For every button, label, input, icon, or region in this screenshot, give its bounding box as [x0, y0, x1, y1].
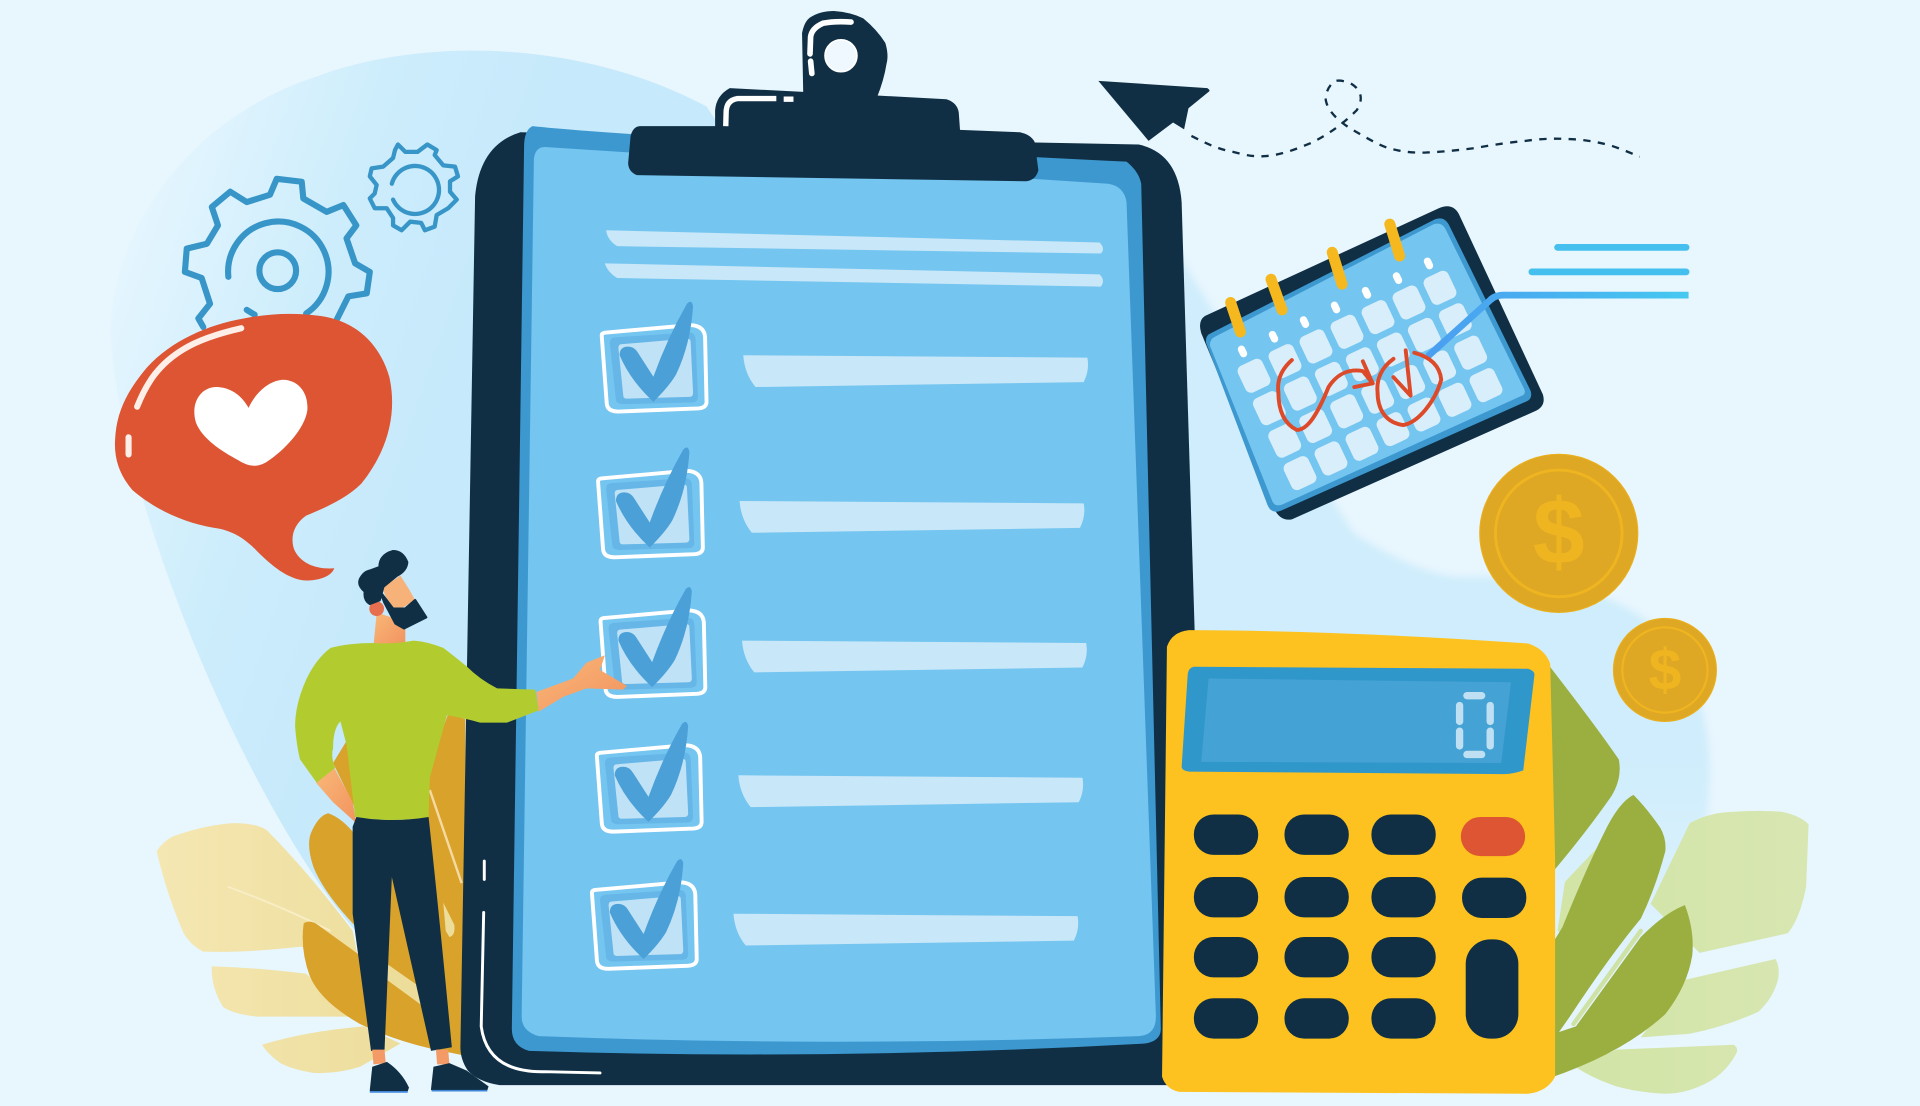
man — [295, 551, 627, 1092]
coin small — [1614, 619, 1716, 721]
row 4 — [597, 722, 1083, 832]
small gear — [370, 145, 458, 230]
speech bubble — [115, 314, 392, 581]
board highlight — [481, 861, 600, 1073]
calendar grid — [1228, 252, 1504, 492]
red marker scribble — [1278, 350, 1441, 430]
row 1 — [602, 302, 1088, 412]
calculator — [1162, 630, 1555, 1094]
paper shadow edge — [512, 126, 1161, 1054]
display digit — [1460, 696, 1490, 754]
face — [382, 576, 415, 614]
pen line — [1428, 295, 1689, 356]
calendar rings — [1231, 224, 1400, 332]
paper — [522, 147, 1156, 1042]
large gear — [185, 179, 370, 327]
dashed flight path — [1191, 81, 1640, 157]
speed lines — [1532, 247, 1686, 272]
icon: heart — [194, 380, 307, 466]
background blob left — [110, 51, 882, 1053]
pale green leaves — [1651, 811, 1809, 953]
hair — [359, 551, 407, 604]
leaf veins — [430, 790, 462, 883]
orange leaves — [367, 714, 465, 1056]
clip body — [628, 88, 1038, 181]
sweater — [295, 641, 539, 820]
keys — [1194, 814, 1526, 1039]
display — [1182, 667, 1534, 774]
right arm skin — [536, 655, 627, 712]
neck — [373, 612, 405, 645]
clipboard — [460, 11, 1196, 1085]
row 5 — [592, 859, 1078, 969]
row 3 — [600, 587, 1087, 697]
right leaves — [1548, 664, 1809, 1094]
coin large: $ — [1533, 479, 1585, 583]
left hand skin — [316, 768, 356, 823]
clip — [628, 11, 1038, 181]
ear — [369, 601, 384, 616]
row 2 — [598, 448, 1084, 557]
ankles — [372, 1050, 449, 1064]
trousers — [353, 817, 452, 1051]
coin small: $ — [1649, 638, 1681, 703]
beard — [381, 593, 426, 628]
paper plane — [1098, 81, 1640, 157]
feet — [370, 1062, 409, 1091]
heading lines — [606, 230, 1103, 254]
soles — [370, 1091, 487, 1092]
left leaves — [157, 714, 465, 1073]
calendar — [1200, 206, 1689, 520]
coin large — [1480, 454, 1638, 612]
gears — [185, 145, 458, 327]
olive leaves — [1548, 664, 1620, 872]
pale leaves — [157, 823, 358, 955]
background blob right — [1163, 251, 1710, 1078]
board — [460, 132, 1196, 1085]
clip knob — [802, 11, 888, 98]
